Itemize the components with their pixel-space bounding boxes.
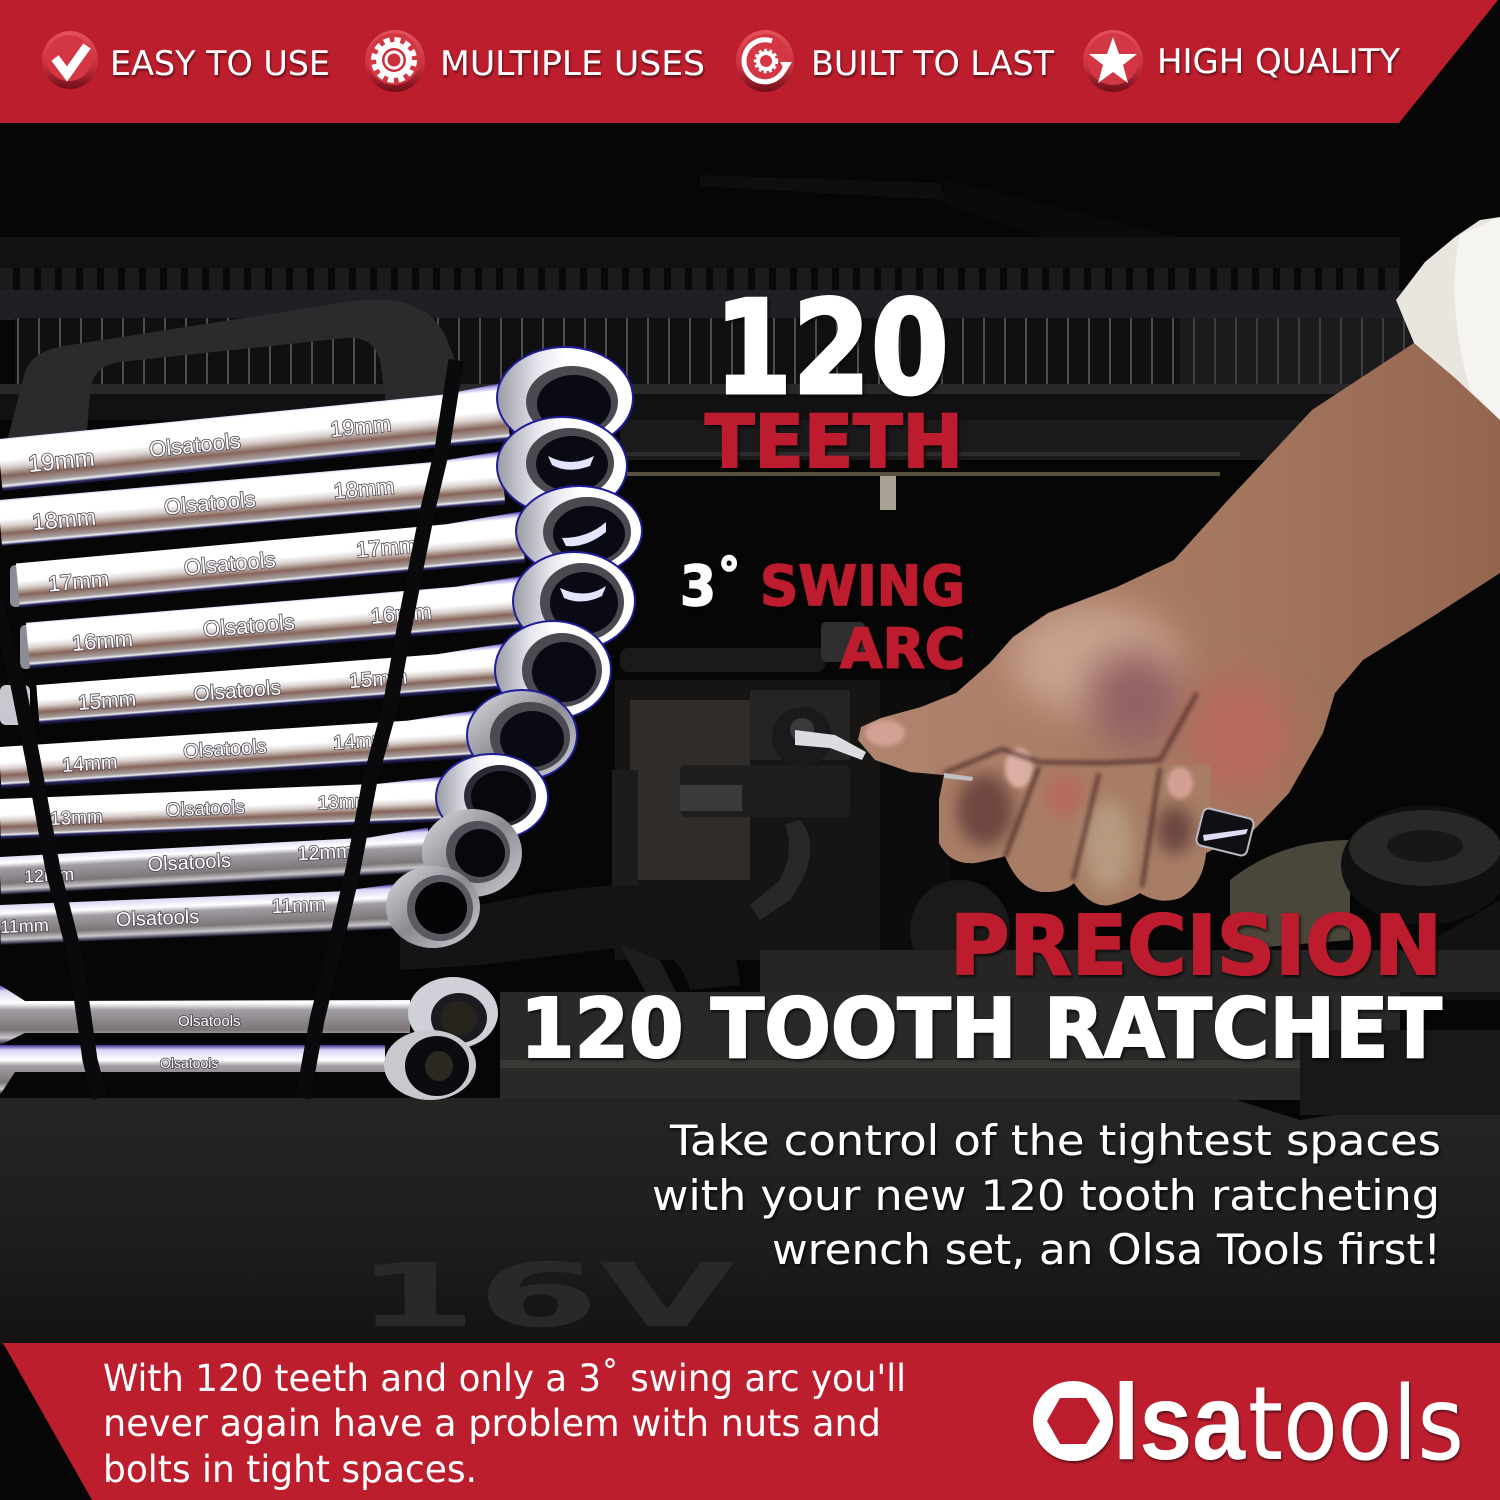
wrench 11mm: 11mm	[271, 894, 326, 918]
headline: 120 TOOTH RATCHET	[520, 982, 1442, 1077]
wrench 18mm: Olsatools	[163, 487, 257, 520]
body copy	[652, 1116, 1441, 1274]
wrench 17mm: 17mm	[355, 532, 418, 563]
stat: 120 teeth: 120	[714, 272, 949, 424]
small wrench lower: Olsatools	[160, 1055, 218, 1071]
wrench 13mm: 13mm	[317, 791, 371, 814]
finger creases	[944, 693, 1197, 887]
body copy: wrench set, an Olsa Tools first!	[772, 1225, 1441, 1274]
footer note: bolts in tight spaces.	[103, 1448, 477, 1491]
wrench 18mm: 18mm	[332, 474, 395, 504]
wrench 14mm: 14mm	[61, 751, 118, 777]
middle finger tint	[1045, 773, 1085, 817]
wrench 15mm: 15mm	[77, 688, 137, 715]
wrench 18mm: 18mm	[31, 504, 97, 535]
label: built to last: BUILT TO LAST	[811, 44, 1054, 84]
wrench 16mm: 16mm	[71, 626, 134, 656]
chrome ring end	[1195, 807, 1255, 857]
wrench 16mm: 16mm	[370, 599, 433, 629]
embossed 16V mark: 16V	[355, 1244, 735, 1347]
wrench 12mm	[0, 809, 522, 897]
wrench set	[0, 346, 643, 1100]
wrench 16mm: Olsatools	[202, 609, 296, 642]
body copy: with your new 120 tooth ratcheting	[652, 1171, 1440, 1220]
wrench 17mm	[10, 485, 643, 609]
pinky shade	[1157, 806, 1193, 854]
wrench 12mm: 12mm	[297, 841, 353, 865]
wrench 16mm	[20, 551, 636, 670]
wrench 14mm: Olsatools	[183, 736, 267, 763]
sleeve shading	[1454, 217, 1500, 420]
small ratchet in hand	[772, 707, 973, 781]
wrench 19mm	[0, 346, 634, 493]
label: multiple uses: MULTIPLE USES	[440, 44, 705, 84]
wrench 15mm	[0, 620, 612, 725]
logo: lsa	[1113, 1361, 1246, 1482]
wrench 18mm	[0, 416, 628, 549]
headline	[520, 899, 1442, 1077]
finger group	[935, 693, 1210, 910]
hand bruise shading	[1087, 650, 1183, 750]
wrench 12mm: Olsatools	[147, 850, 231, 876]
wrench 11mm	[0, 866, 480, 948]
stat: 3 degree swing arc: 3˚	[680, 554, 742, 618]
wrench 14mm: 14mm	[332, 729, 389, 754]
icon: check	[42, 31, 98, 89]
rack straps	[0, 360, 456, 1098]
arm and hand photo	[772, 217, 1500, 920]
thumb tip	[865, 720, 905, 746]
wrench 15mm: 15mm	[348, 666, 408, 693]
footer note: never again have a problem with nuts and	[103, 1402, 881, 1445]
wrench 19mm: 19mm	[27, 445, 96, 478]
logo	[1033, 1361, 1464, 1484]
ring finger light	[1084, 800, 1132, 890]
stat: 3 degree swing arc: SWING	[760, 554, 965, 618]
index finger shade	[957, 774, 1013, 846]
wrench 15mm: Olsatools	[193, 676, 282, 706]
wrench 11mm: 11mm	[0, 915, 49, 937]
small wrench upper	[0, 977, 498, 1049]
wrench 19mm: Olsatools	[148, 428, 242, 462]
logo: tools	[1248, 1365, 1464, 1484]
icon: refresh gear	[736, 30, 794, 92]
back of hand highlight	[1010, 605, 1180, 715]
sleeve	[1396, 217, 1500, 420]
bottom banner	[3, 1343, 1500, 1500]
footer note: With 120 teeth and only a 3˚ swing arc you'll	[103, 1357, 906, 1400]
body copy: Take control of the tightest spaces	[669, 1116, 1441, 1165]
stat: 120 teeth	[705, 272, 963, 485]
hand clipped to silhouette	[858, 343, 1500, 906]
wrench rack handle	[6, 299, 460, 445]
wrench 17mm: Olsatools	[183, 547, 276, 580]
index fingertip	[1005, 748, 1033, 788]
wrench 17mm: 17mm	[47, 566, 110, 597]
top banner	[0, 0, 1498, 123]
label: easy to use: EASY TO USE	[110, 44, 330, 84]
headline: PRECISION	[950, 899, 1442, 994]
small wrench upper: Olsatools	[178, 1013, 241, 1030]
wrench 12mm: 12mm	[24, 864, 75, 887]
wrench 19mm: 19mm	[329, 411, 392, 442]
pinky fingertip	[1167, 767, 1193, 799]
wrench 13mm: Olsatools	[165, 797, 245, 821]
small wrench lower	[0, 1030, 476, 1100]
finger base tone	[935, 765, 1210, 910]
palm redness	[1190, 675, 1290, 795]
icon: star	[1083, 30, 1143, 92]
stat: 120 teeth: TEETH	[705, 400, 963, 485]
wrench 13mm: 13mm	[50, 807, 103, 830]
wrench 11mm: Olsatools	[115, 906, 200, 931]
stat: 3 degree swing arc: ARC	[840, 617, 965, 681]
wrench 13mm	[0, 753, 549, 841]
footer note	[103, 1357, 906, 1491]
stat: 3 degree swing arc	[680, 554, 965, 681]
icon: gear	[365, 30, 425, 92]
label: high quality: HIGH QUALITY	[1157, 42, 1400, 82]
wrench 14mm	[0, 689, 578, 789]
